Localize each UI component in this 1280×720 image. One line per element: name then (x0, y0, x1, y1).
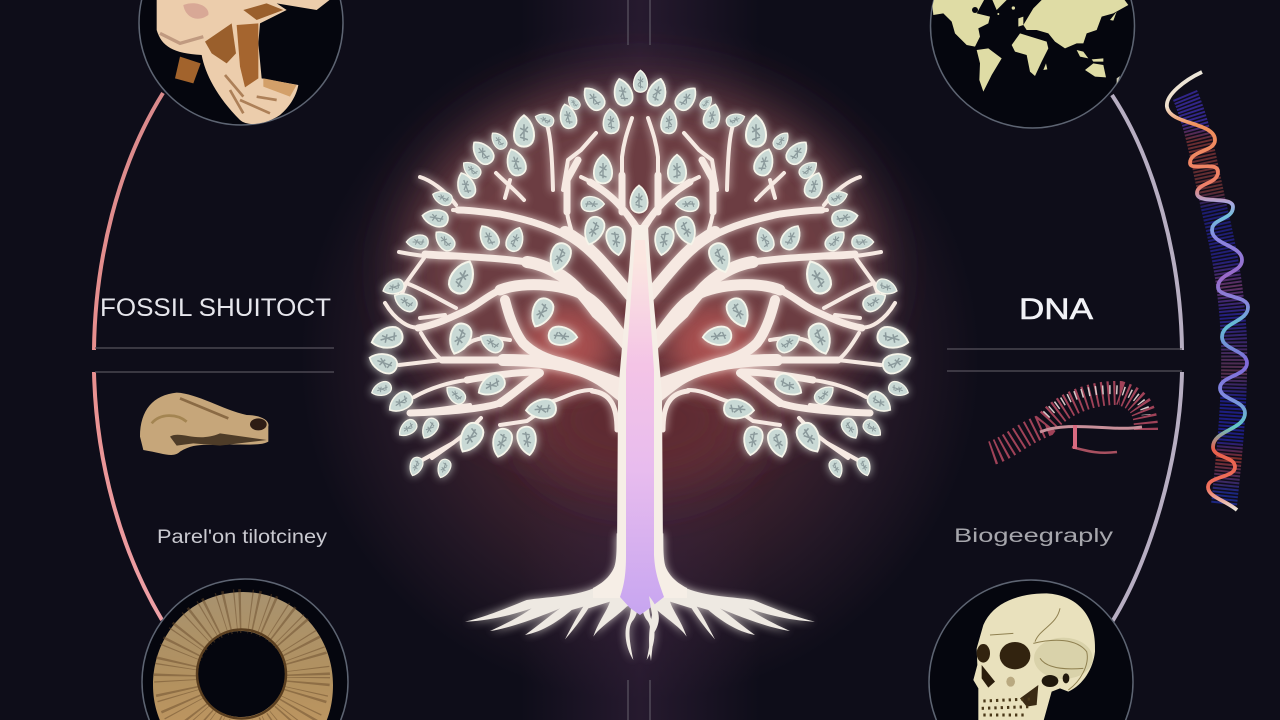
DNA helix (1167, 72, 1248, 510)
tree glow (367, 77, 913, 660)
DNA specimen (992, 390, 1146, 453)
vertical connector: top (628, 0, 650, 45)
tree of life (367, 70, 913, 661)
circle: world map (930, 0, 1134, 128)
left divider lines (95, 348, 334, 372)
vertical connector: bottom (628, 680, 650, 720)
circle: ammonite (142, 579, 348, 720)
right evidence arc (1112, 95, 1182, 622)
circle: skull (929, 580, 1133, 720)
label: biogeography: Biogeegraply (954, 526, 1114, 547)
trunk (593, 225, 687, 615)
fossil skull (140, 393, 269, 455)
right half of tree (640, 77, 913, 660)
right divider lines (947, 349, 1182, 371)
label: phylogeny: Parel'on tilotciney (157, 527, 328, 548)
left evidence arc (94, 93, 163, 620)
left half of tree (367, 77, 640, 660)
central root (649, 596, 659, 661)
circle: jaw fossil (139, 0, 343, 125)
label: DNA: DNA (1019, 293, 1093, 326)
centre leaves (630, 70, 669, 213)
label: fossil: FOSSIL SHUITOCT (100, 294, 331, 322)
